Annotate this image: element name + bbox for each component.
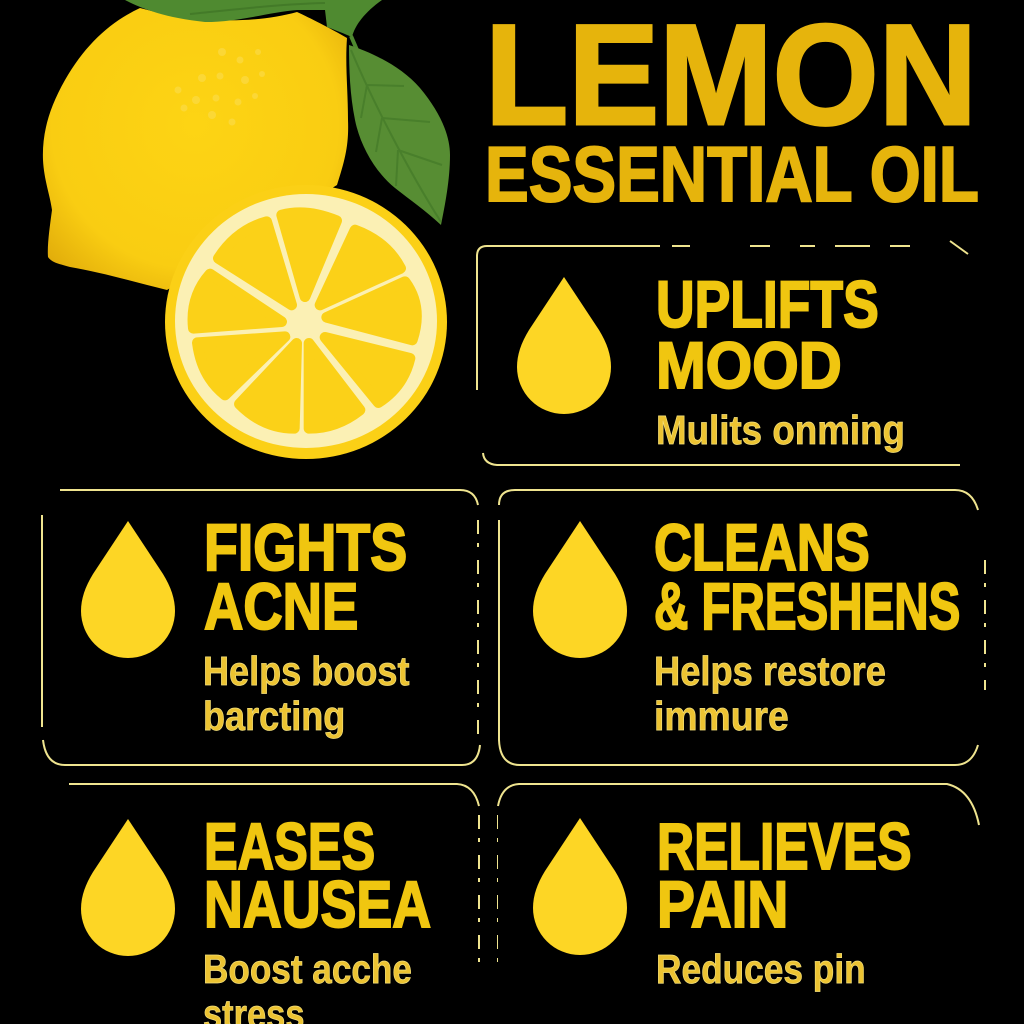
- whole lemon: [43, 8, 348, 290]
- text: [203, 648, 410, 739]
- heading: [204, 510, 407, 643]
- heading: [654, 510, 960, 643]
- subtitle: ESSENTIAL OIL: [485, 130, 979, 218]
- heading: NAUSEA: [204, 867, 431, 941]
- heading: CLEANS: [654, 510, 870, 584]
- text: Boost acche: [203, 946, 412, 992]
- text: [654, 648, 886, 739]
- heading: & FRESHENS: [654, 569, 960, 643]
- heading: EASES: [204, 809, 375, 883]
- text: [203, 946, 412, 1024]
- icon: drop: [533, 818, 627, 955]
- lemon slice: [165, 185, 447, 459]
- card: fights acne: [41, 489, 481, 766]
- illustration: lemon with leaves and slice: [42, 0, 450, 459]
- heading: [204, 809, 431, 941]
- card: cleans and freshens: [498, 489, 986, 766]
- text: Helps boost: [203, 648, 409, 694]
- heading: MOOD: [656, 328, 842, 402]
- heading: PAIN: [657, 867, 788, 941]
- text: barcting: [203, 693, 345, 739]
- text: Reduces pin: [656, 946, 866, 992]
- heading: ACNE: [204, 569, 358, 643]
- text: Mulits onming: [656, 407, 905, 453]
- icon: drop: [517, 277, 611, 414]
- heading: [657, 809, 912, 941]
- icon: drop: [533, 521, 627, 658]
- card: eases nausea: [69, 783, 480, 1024]
- title: LEMON: [485, 0, 977, 155]
- top leaf and stem: [125, 0, 382, 50]
- icon: drop: [81, 521, 175, 658]
- card: relieves pain: [497, 783, 980, 992]
- icon: drop: [81, 819, 175, 956]
- heading: FIGHTS: [204, 510, 407, 584]
- heading: UPLIFTS: [656, 267, 879, 341]
- text: immure: [654, 693, 789, 739]
- card: uplifts mood: [476, 240, 968, 466]
- heading: RELIEVES: [657, 809, 912, 883]
- text: Helps restore: [654, 648, 886, 694]
- heading: [656, 267, 879, 402]
- right leaf: [349, 45, 450, 225]
